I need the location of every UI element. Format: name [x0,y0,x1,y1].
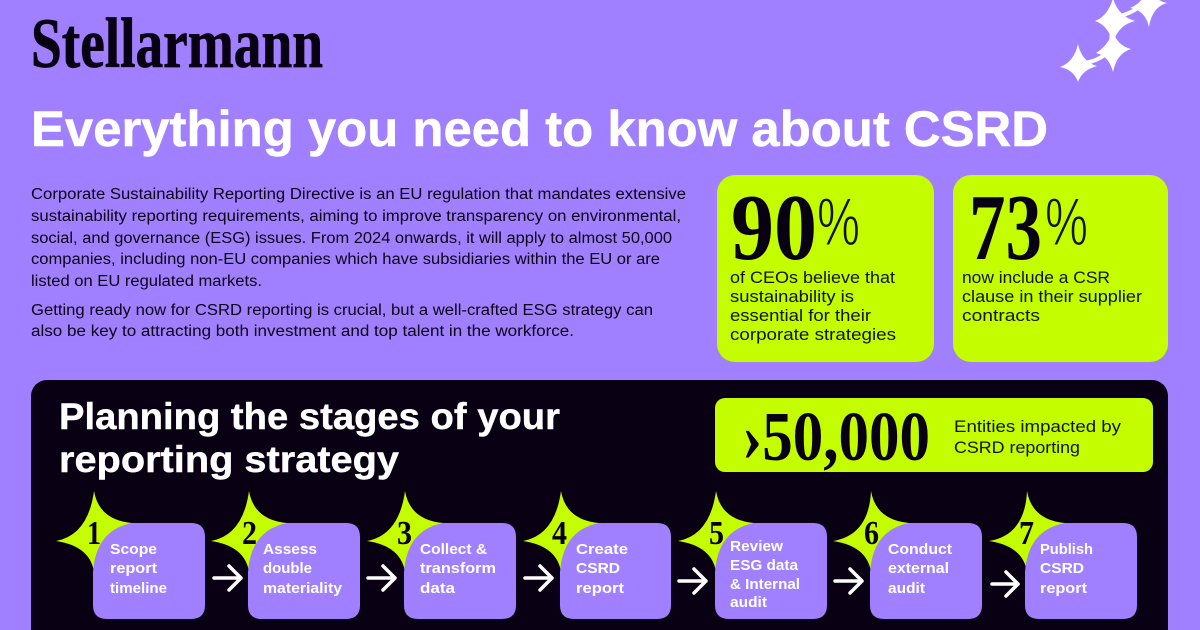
heading: planning: Planning the stages of your [59,396,560,437]
callout: 50,000 entities: CSRD reporting [954,438,1080,457]
panel: 90% stat: of CEOs believe that [730,268,895,287]
step 3: 3 [397,515,412,552]
panel: 73% stat [953,175,1168,362]
icon: sparkle stars [1060,0,1167,82]
heading: planning [59,396,560,480]
panel: 90% stat: corporate strategies [730,325,896,344]
step 5: Review [730,538,783,555]
step 5: audit [730,594,767,611]
step 1: timeline [110,580,167,597]
panel: 90% stat: 90 [731,176,817,280]
step 1 [56,491,205,619]
text block: intro: listed on EU regulated markets. [31,273,262,290]
step 2: double [263,560,312,577]
step 4 [523,491,671,619]
text block: intro: sustainability reporting requirements, aiming to improve transparency on environmental, [31,208,681,225]
step 5: & Internal [730,576,800,593]
logo: Stellarmann: Stellarmann [31,5,323,83]
step 6 [833,491,982,619]
step 5: 5 [709,515,724,552]
panel: 73% stat: contracts [962,306,1040,325]
step 4: report [576,580,624,597]
step 3 [367,491,516,619]
step 2: Assess [263,541,317,558]
step 7: CSRD [1040,560,1084,577]
text block: intro: Getting ready now for CSRD reporting is crucial, but a well-crafted ESG strategy can [31,302,653,319]
panel: 73% stat: % [1045,184,1088,260]
step 6: audit [888,580,925,597]
arrow [679,569,706,593]
step 6: external [888,560,949,577]
panel: 90% stat: sustainability is [730,287,854,306]
text block: intro: social, and governance (ESG) issues. From 2024 onwards, it will apply to almost 50,000 [31,230,672,247]
step 6: Conduct [888,541,952,558]
arrow [992,572,1018,596]
step 3: data [420,580,456,597]
step 2 [211,491,360,619]
panel: 90% stat: % [817,184,860,260]
panel: 90% stat [717,175,934,362]
callout: 50,000 entities [715,398,1153,476]
callout: 50,000 entities: Entities impacted by [954,417,1122,436]
step 4: Create [576,541,628,558]
step 2: materiality [263,580,343,597]
step 6: 6 [864,515,879,552]
step 7 [989,491,1137,619]
step 3: transform [420,560,496,577]
step 7: 7 [1019,515,1034,552]
arrow [525,566,552,590]
step 1: Scope [110,541,157,558]
panel: 73% stat: now include a CSR [962,268,1110,287]
panel: planning the stages [31,380,1168,630]
step 7: report [1040,580,1087,597]
panel: 73% stat: 73 [969,176,1042,280]
text block: intro: also be key to attracting both investment and top talent in the workforce. [31,323,574,340]
text block: intro: Corporate Sustainability Reporting Directive is an EU regulation that mandates extensive [31,186,686,203]
step 2: 2 [242,515,257,552]
text block: intro [31,186,686,340]
step 1: report [110,560,157,577]
step 7: Publish [1040,541,1093,558]
step 4: CSRD [576,560,620,577]
step 1: 1 [87,515,101,552]
arrow [214,566,241,590]
heading: planning: reporting strategy [59,439,399,480]
text block: intro: companies, including non-EU companies which have subsidiaries within the EU or are [31,251,660,268]
step 5: ESG data [730,557,799,574]
callout: 50,000 entities: ›50,000 [742,399,930,476]
step 4: 4 [552,515,567,552]
step 3: Collect & [420,541,487,558]
step 5 [678,491,827,619]
arrow [835,569,862,593]
arrow [368,566,395,590]
panel: 90% stat: essential for their [730,306,871,325]
panel: 73% stat: clause in their supplier [962,287,1142,306]
title: Everything you need to know about CSRD [31,101,1048,157]
